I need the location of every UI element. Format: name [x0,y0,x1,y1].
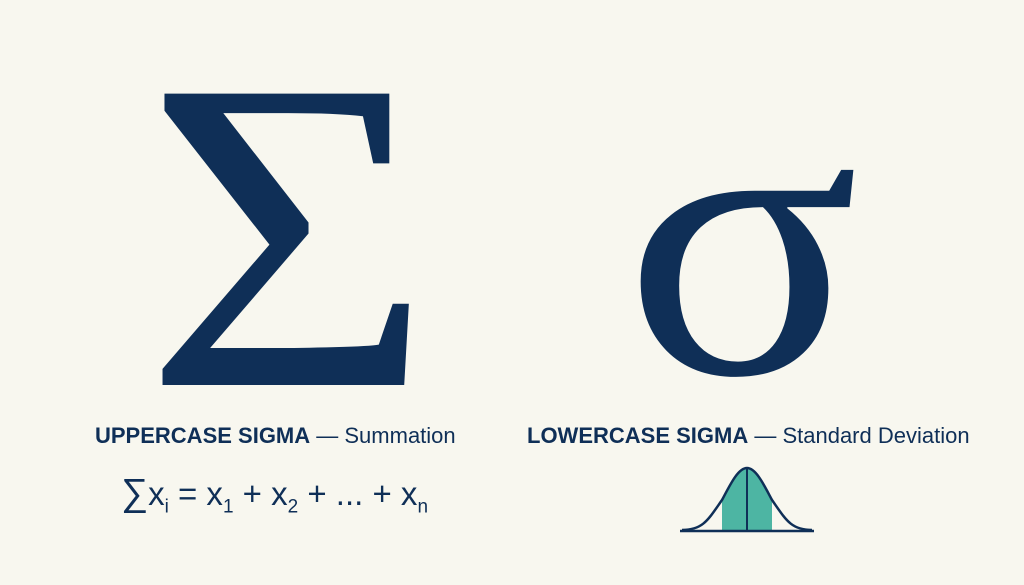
chart: bell curve [680,466,814,532]
heading: lowercase sigma: LOWERCASE SIGMA — Standard Deviation [527,423,970,448]
formula: summation: ∑xi = x1 + x2 + ... + xn [121,472,428,518]
heading: uppercase sigma: UPPERCASE SIGMA — Summation [95,423,456,448]
